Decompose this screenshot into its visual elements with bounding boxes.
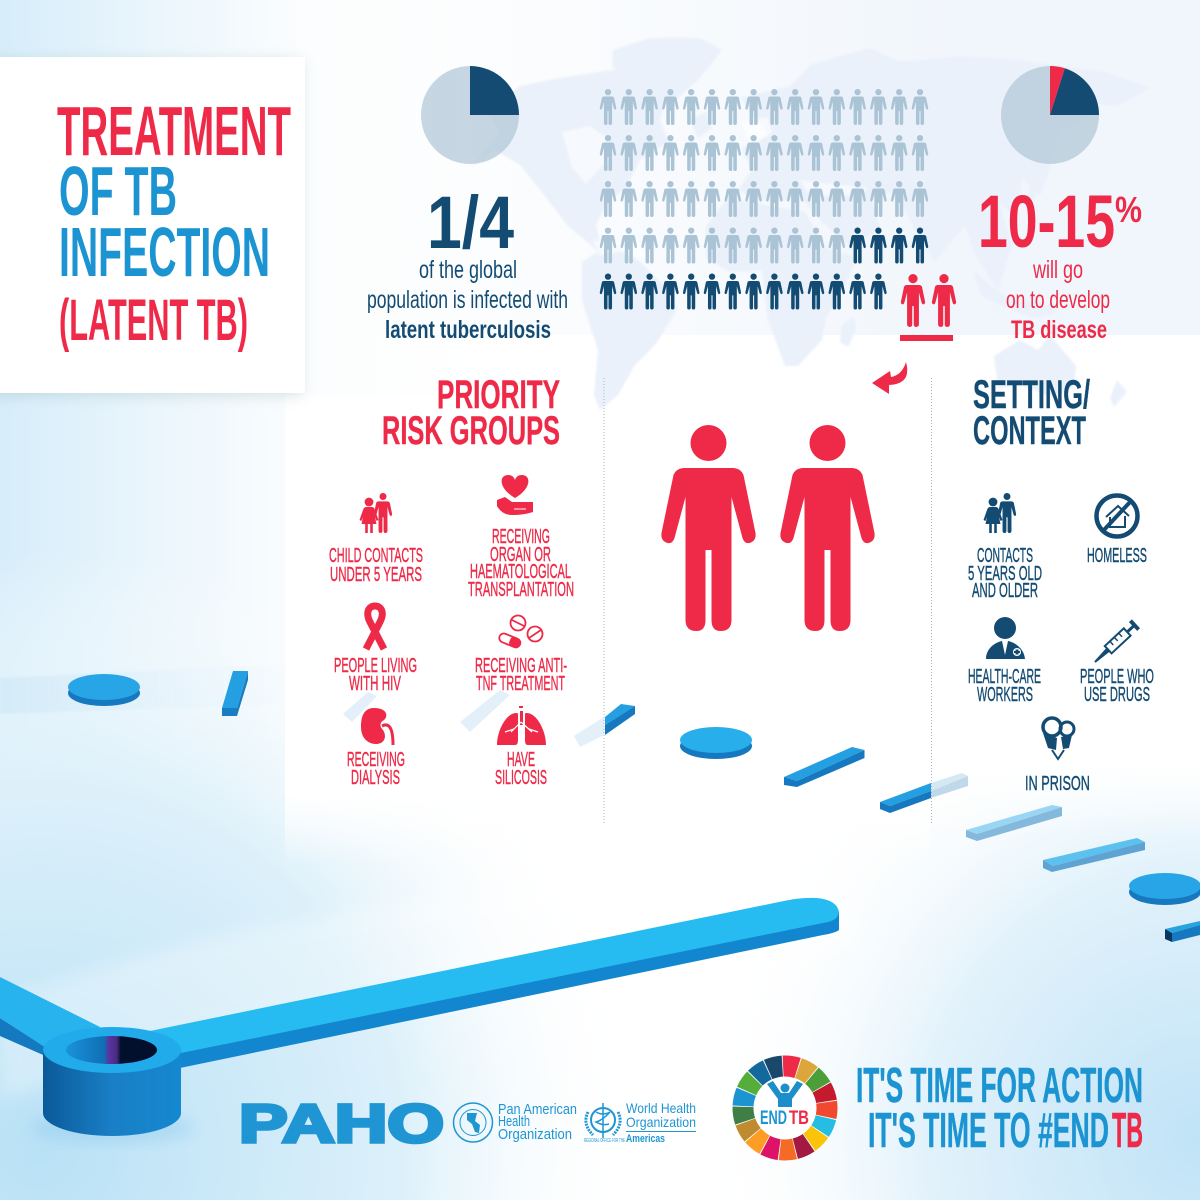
label: silicosis [495,749,547,789]
bar C [880,773,968,813]
label: transplantation: ORGAN OR [490,544,551,566]
heading: priority risk groups: PRIORITY [437,373,560,417]
stat: 10-15% [978,180,1142,344]
logo: PAHO: PAHO [239,1094,444,1154]
logo: WHO name: REGIONAL OFFICE FOR THE [584,1138,625,1144]
pictogram: population [600,89,956,341]
panel: setting context [968,493,1154,795]
icon: lungs [497,706,546,745]
arrow [872,362,907,394]
logo: WHO name: Americas [626,1133,665,1145]
tagline [856,1059,1143,1158]
logo: End TB wheel: TB [789,1108,809,1129]
label: health-care: WORKERS [977,684,1033,706]
stat: 1/4 [367,181,568,344]
bar bottom right [1165,921,1200,942]
logo: End TB wheel: END [760,1108,787,1129]
heading: TREATMENT [57,92,291,170]
label: contacts: AND OLDER [972,580,1038,602]
label: transplantation: RECEIVING [492,526,550,548]
icon: contacts [984,493,1016,533]
label: HIV: PEOPLE LIVING [334,655,417,677]
stat: 10-15%: TB disease [1011,316,1107,344]
heading: INFECTION [59,213,270,291]
label: transplantation: TRANSPLANTATION [468,579,574,601]
label: contacts: CONTACTS [977,545,1033,567]
logo: PAHO name: Health [498,1113,530,1130]
heading: setting context [973,373,1090,453]
label: contacts: 5 YEARS OLD [968,563,1042,585]
stat: 10-15%: 10-15 [978,180,1115,263]
label: anti-TNF: RECEIVING ANTI- [475,655,567,677]
logo: WHO name: Organization [626,1114,696,1130]
icon: pills [498,616,542,649]
label: people who use drugs [1080,666,1154,706]
disc right [1129,873,1200,905]
divider right [930,378,932,823]
label: transplantation: HAEMATOLOGICAL [470,561,571,583]
label: child contacts: UNDER 5 YEARS [330,564,422,586]
large blue stick with ring [0,898,839,1136]
logo: End TB wheel [726,1049,844,1167]
stat: 10-15%: on to develop [1006,286,1110,314]
logo: WHO emblem [586,1103,620,1138]
icon: health worker [986,617,1025,659]
icon: heart in hand [497,475,533,515]
label: people who use drugs: USE DRUGS [1084,684,1150,706]
label: HIV [334,655,417,695]
logo: WHO name [584,1100,696,1145]
label: dialysis [347,749,405,789]
divider left [603,378,605,823]
stat: 1/4: population is infected with [367,286,568,314]
heading: setting context: SETTING/ [973,373,1090,417]
bar A [605,704,635,735]
stat: 1/4: of the global [419,256,517,284]
logo: PAHO name [498,1101,577,1143]
heading: priority risk groups [382,373,560,453]
world map [470,38,1150,410]
icon: family [360,493,392,533]
bar E [1043,838,1145,872]
stat: 1/4: latent tuberculosis [385,316,551,344]
label: contacts [968,545,1042,602]
bar B [784,747,864,787]
icon: homeless [1096,496,1138,536]
panel: priority risk groups [329,475,574,789]
label: dialysis: RECEIVING [347,749,405,771]
disc left [68,674,140,706]
ghost bars [343,690,604,747]
text: TB [1112,1104,1143,1158]
label: silicosis: HAVE [507,749,535,771]
bar left [222,671,248,716]
stat: 10-15%: will go [1032,256,1083,284]
logo: PAHO seal [454,1103,492,1142]
icon: syringe [1091,621,1139,666]
label: HIV: WITH HIV [349,673,401,695]
label: health-care: HEALTH-CARE [968,666,1041,688]
logo: WHO name: World Health [626,1100,696,1116]
large red figures [661,425,875,631]
icon: ribbon [366,606,384,649]
logo: PAHO name: Pan American [498,1101,577,1118]
label: silicosis: SILICOSIS [495,767,547,789]
label: child contacts: CHILD CONTACTS [329,545,423,567]
icon: kidney [361,708,393,745]
icon: handcuffs [1043,718,1074,759]
logo: PAHO name: Organization [498,1126,572,1143]
decorative isometric bars [68,671,1200,942]
heading: priority risk groups: RISK GROUPS [382,409,560,453]
heading: OF TB [59,152,177,230]
label: health-care [968,666,1041,706]
pie: 10-15 percent [1001,66,1099,164]
bar D [966,805,1062,841]
label: anti-TNF: TNF TREATMENT [476,673,565,695]
label: transplantation [468,526,574,601]
stat: 10-15%: % [1115,189,1142,230]
heading: setting context: CONTEXT [973,409,1086,453]
stat: 1/4: 1/4 [427,181,514,264]
disc centre [680,727,752,759]
label: homeless: HOMELESS [1087,545,1147,567]
heading [57,92,291,353]
pie: one quarter [421,66,519,164]
label: child contacts [329,545,423,586]
panel: title [0,57,305,396]
heading: (LATENT TB) [59,288,248,353]
label: in prison: IN PRISON [1025,773,1090,795]
label: anti-TNF [475,655,567,695]
label: dialysis: DIALYSIS [351,767,400,789]
